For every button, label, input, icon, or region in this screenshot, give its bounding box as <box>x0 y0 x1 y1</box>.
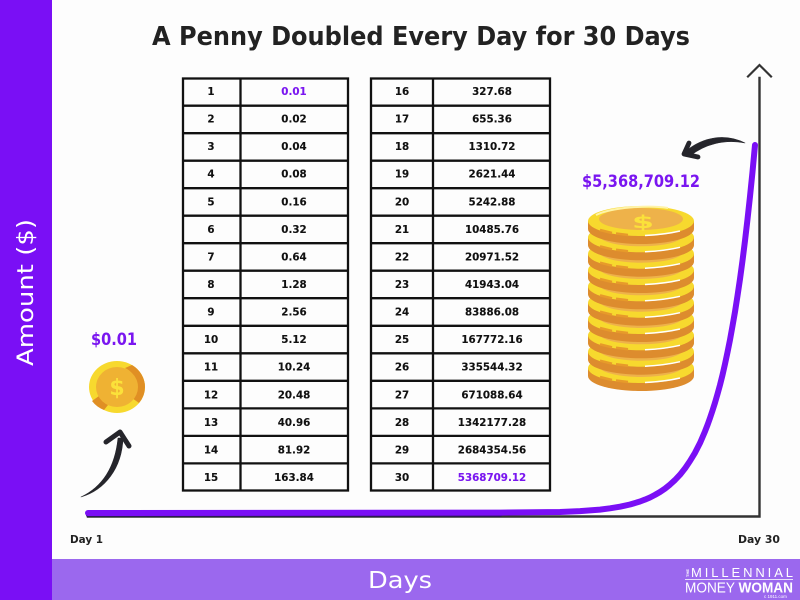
label: $5,368,709.12: $5,368,709.12 <box>582 172 700 191</box>
table: days 1 to 15 <box>183 78 348 491</box>
table: days 16 to 30: 22 <box>395 251 409 263</box>
table: days 16 to 30: 10485.76 <box>465 224 519 236</box>
table: days 1 to 15: 163.84 <box>274 472 314 484</box>
table: days 16 to 30: 1310.72 <box>469 141 515 153</box>
icon: stack of gold coins <box>588 206 694 391</box>
icon: single gold coin: $ <box>109 376 125 401</box>
table: days 1 to 15: 3 <box>207 141 215 153</box>
table: days 1 to 15: 0.32 <box>281 224 307 236</box>
table: days 1 to 15: 0.01 <box>281 86 307 98</box>
table: days 1 to 15: 0.02 <box>281 114 307 126</box>
table: days 1 to 15: 10.24 <box>278 362 310 374</box>
exponential growth curve <box>88 145 755 515</box>
table: days 1 to 15: 5 <box>207 196 215 208</box>
table: days 16 to 30: 23 <box>395 279 409 291</box>
table: days 16 to 30: 2621.44 <box>469 169 515 181</box>
table: days 16 to 30: 29 <box>395 444 409 456</box>
bottom bar: x axis label panel <box>52 559 800 600</box>
table: days 16 to 30: 16 <box>395 86 409 98</box>
table: days 1 to 15: 13 <box>204 417 218 429</box>
table: days 1 to 15: 0.16 <box>281 196 307 208</box>
table: days 1 to 15: 15 <box>204 472 218 484</box>
table: days 16 to 30: 20 <box>395 196 409 208</box>
table: days 16 to 30: 655.36 <box>472 114 512 126</box>
label: $0.01: $0.01 <box>91 330 137 349</box>
table: days 16 to 30: 671088.64 <box>461 389 523 401</box>
sidebar: y axis label panel <box>0 0 52 600</box>
table: days 1 to 15: 5.12 <box>281 334 307 346</box>
table: days 16 to 30: 24 <box>395 307 409 319</box>
table: days 1 to 15: 2 <box>207 114 215 126</box>
label: Day 1: Day 1 <box>70 533 103 546</box>
table: days 16 to 30: 5368709.12 <box>458 472 526 484</box>
table: days 16 to 30: 28 <box>395 417 409 429</box>
table: days 16 to 30: 18 <box>395 141 409 153</box>
table: days 1 to 15: 1 <box>207 86 215 98</box>
bottom bar: x axis label panel: Days <box>368 568 432 594</box>
table: days 16 to 30: 2684354.56 <box>458 444 526 456</box>
table: days 1 to 15: 10 <box>204 334 218 346</box>
table: days 1 to 15: 0.64 <box>281 251 307 263</box>
table: days 16 to 30: 327.68 <box>472 86 512 98</box>
table: days 1 to 15: 6 <box>207 224 215 236</box>
table: days 16 to 30: 5242.88 <box>469 196 515 208</box>
table: days 1 to 15: 1.28 <box>281 279 307 291</box>
table: days 1 to 15: 8 <box>207 279 215 291</box>
arrow: up to coin <box>81 432 129 497</box>
table: days 16 to 30: 27 <box>395 389 409 401</box>
table: days 1 to 15: 7 <box>207 251 215 263</box>
logo: The Millennial Money Woman: MILLENNIAL <box>691 565 793 580</box>
table: days 1 to 15: 11 <box>204 362 218 374</box>
table: days 16 to 30: 20971.52 <box>465 251 519 263</box>
table: days 16 to 30: 30 <box>395 472 409 484</box>
icon: stack of gold coins: $ <box>632 212 654 233</box>
title: A Penny Doubled Every Day for 30 Days <box>152 22 690 52</box>
logo: The Millennial Money Woman <box>685 565 793 599</box>
table: days 1 to 15: 20.48 <box>278 389 310 401</box>
table: days 16 to 30: 17 <box>395 114 409 126</box>
table: days 1 to 15: 12 <box>204 389 218 401</box>
arrow: curve top to coin stack <box>684 137 745 157</box>
table: days 1 to 15: 0.04 <box>281 141 307 153</box>
chart axes with arrowhead <box>88 65 771 516</box>
table: days 16 to 30: 167772.16 <box>461 334 523 346</box>
table: days 16 to 30: 21 <box>395 224 409 236</box>
logo: The Millennial Money Woman: c 1911.com <box>764 594 787 599</box>
table: days 1 to 15: 0.08 <box>281 169 307 181</box>
table: days 16 to 30: 335544.32 <box>461 362 523 374</box>
table: days 16 to 30: 25 <box>395 334 409 346</box>
table: days 1 to 15: 14 <box>204 444 218 456</box>
table: days 1 to 15: 2.56 <box>281 307 307 319</box>
table: days 16 to 30: 1342177.28 <box>458 417 526 429</box>
table: days 1 to 15: 4 <box>207 169 215 181</box>
logo: The Millennial Money Woman: MONEY WOMAN <box>685 580 793 596</box>
table: days 16 to 30: 26 <box>395 362 409 374</box>
table: days 16 to 30: 41943.04 <box>465 279 519 291</box>
label: Day 30: Day 30 <box>738 533 780 546</box>
table: days 1 to 15: 40.96 <box>278 417 310 429</box>
logo: The Millennial Money Woman: THE <box>685 569 690 577</box>
table: days 16 to 30: 83886.08 <box>465 307 519 319</box>
icon: single gold coin <box>89 361 145 413</box>
table: days 1 to 15: 9 <box>207 307 215 319</box>
table: days 1 to 15: 81.92 <box>278 444 310 456</box>
sidebar: y axis label panel: Amount ($) <box>14 219 39 366</box>
table: days 16 to 30: 19 <box>395 169 409 181</box>
table: days 16 to 30 <box>371 78 550 491</box>
